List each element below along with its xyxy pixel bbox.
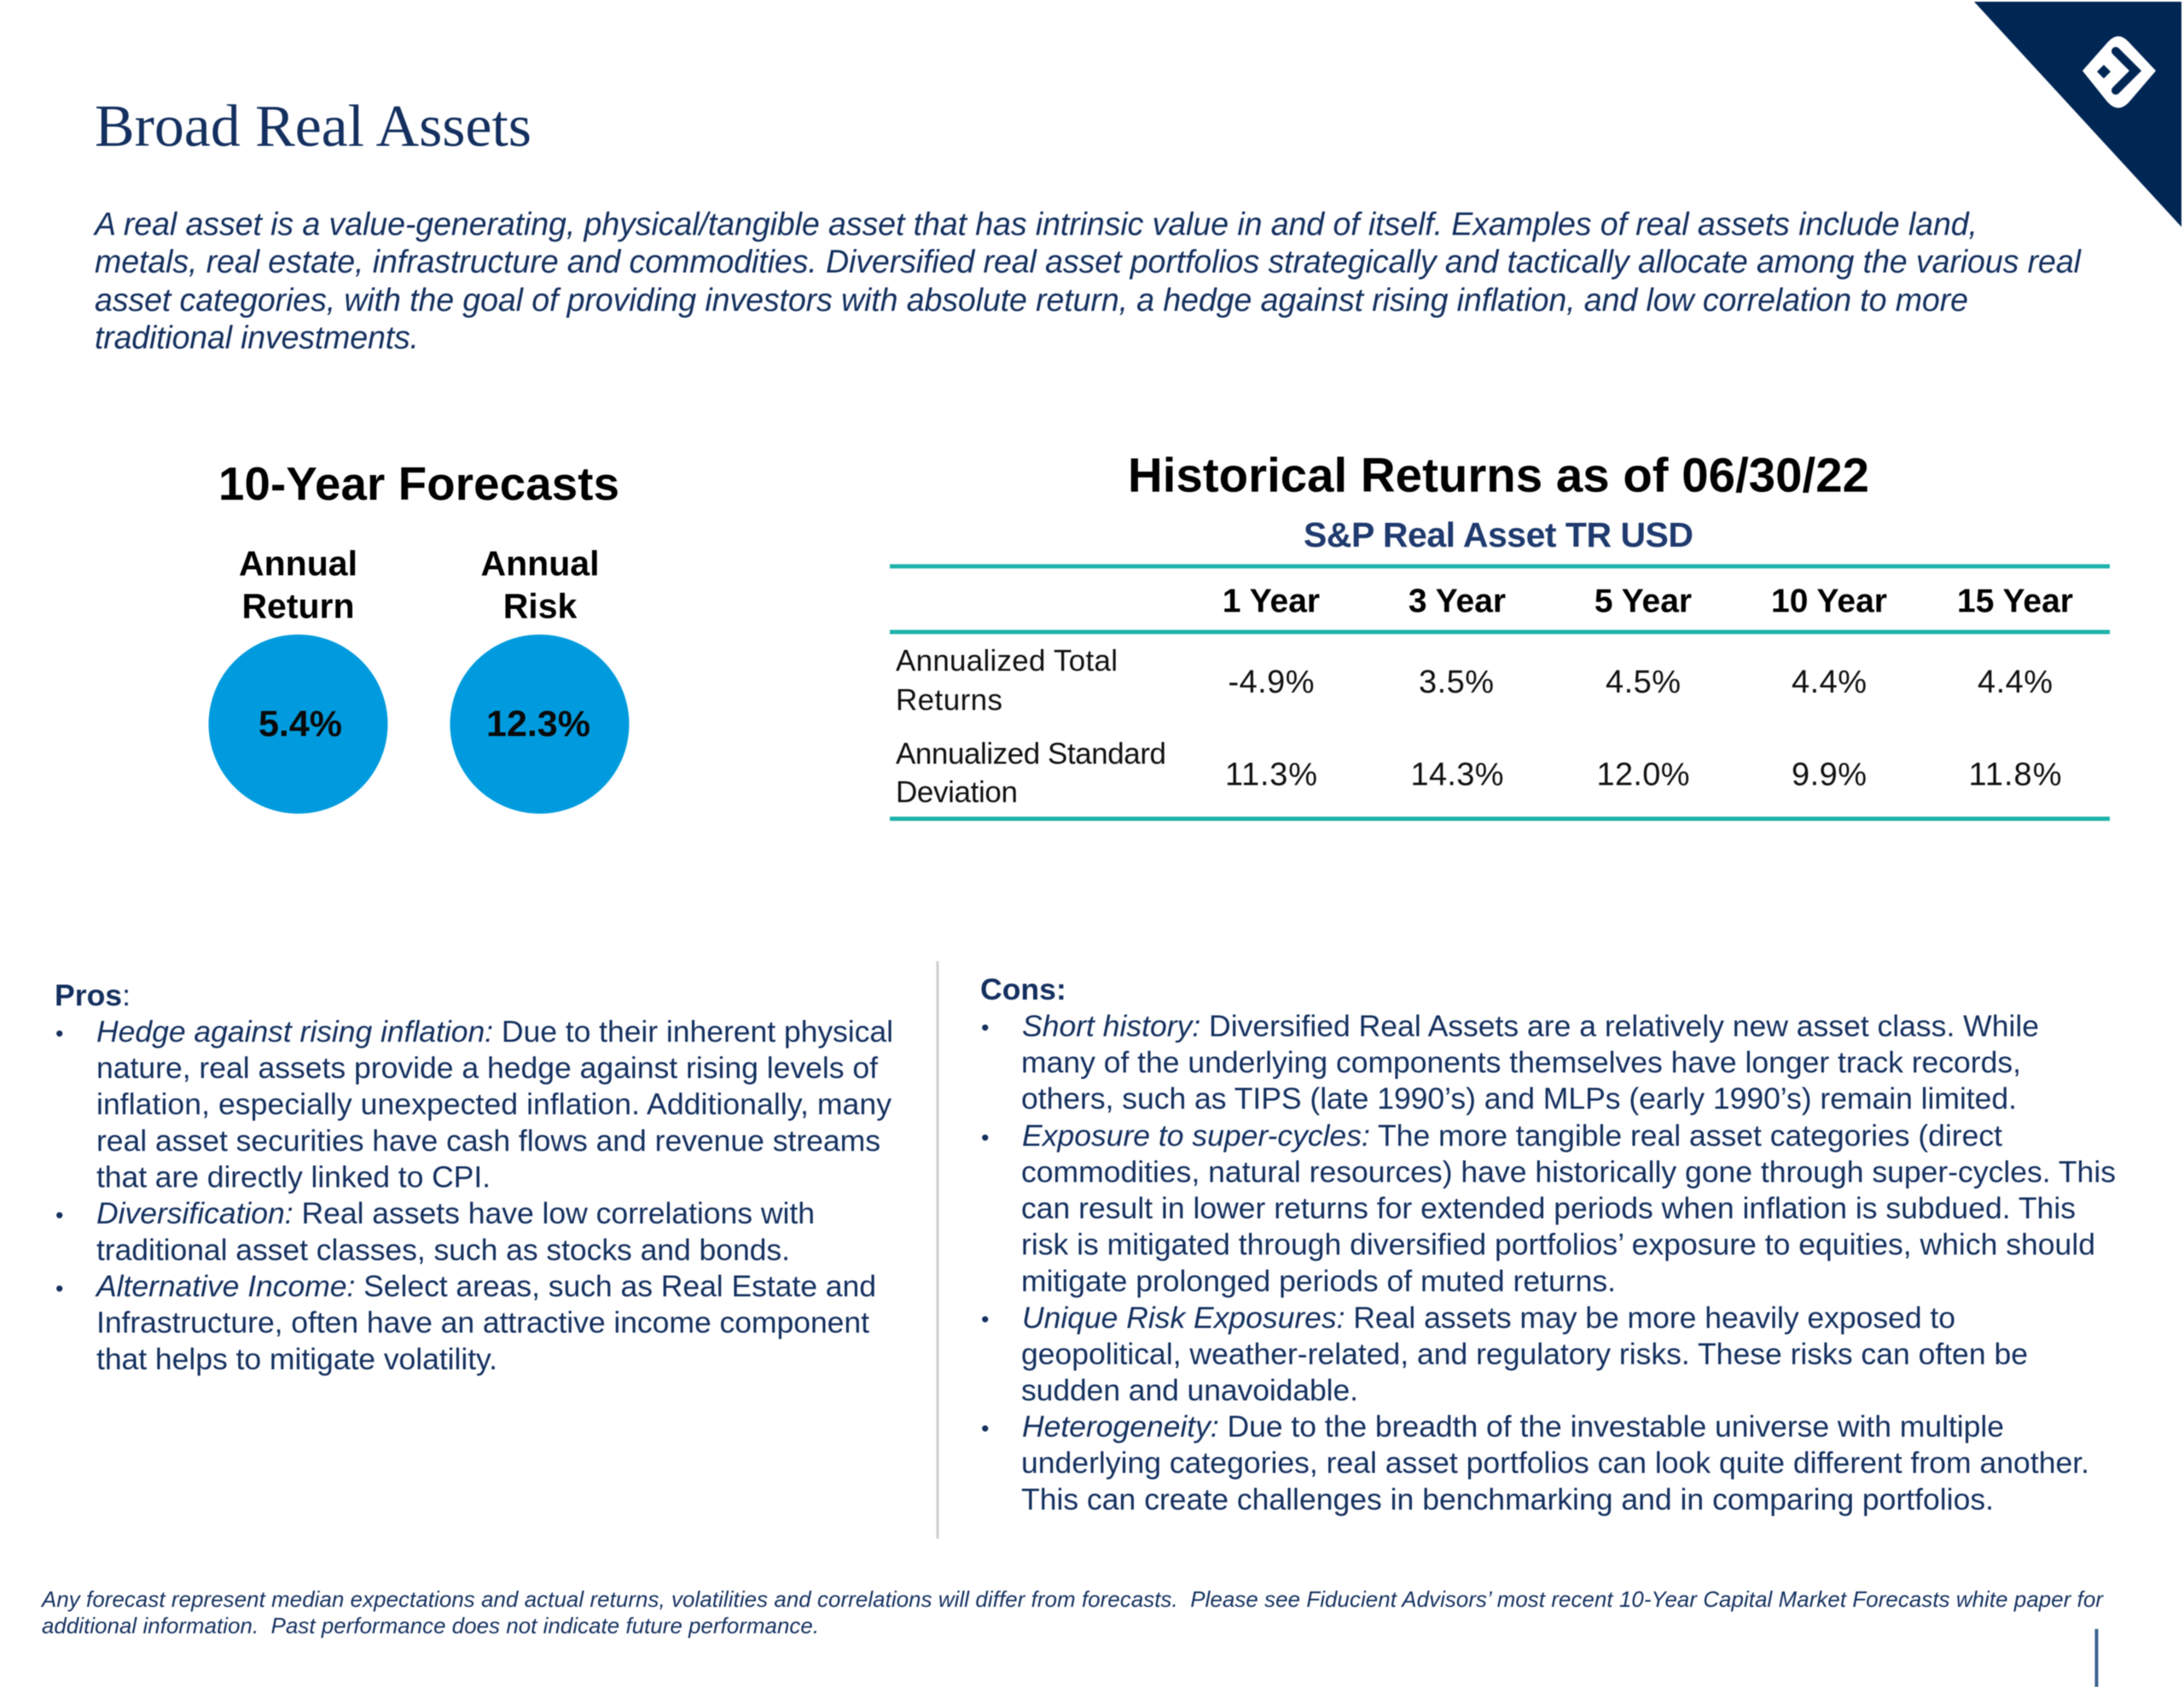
- pros heading: Pros:: [55, 978, 131, 1012]
- circle: annual return 5.4%: [208, 635, 387, 814]
- table row: annualized standard deviation: 14.3%: [1411, 757, 1503, 793]
- table header row: 5 Year: [1594, 583, 1692, 619]
- con: unique risk exposures: •: [981, 1307, 989, 1332]
- table header row: 1 Year: [1223, 583, 1320, 619]
- corner logo: [1974, 2, 2181, 227]
- panel: 10-year forecasts: [208, 458, 630, 814]
- con: exposure to super-cycles: can result in lower returns for extended periods when inflation is subdued. This: [1021, 1191, 2076, 1225]
- pro: alternative income: that helps to mitigate volatility.: [96, 1342, 497, 1377]
- panel: cons: [980, 972, 2116, 1516]
- annual risk label: Annual: [481, 544, 599, 583]
- table row: annualized total returns: [896, 645, 2053, 716]
- intro paragraph: asset categories, with the goal of providing investors with absolute return, a hedge against rising inflation, and low correlation to more: [95, 281, 1968, 317]
- subheading: index name: S&P Real Asset TR USD: [1304, 515, 1693, 554]
- con: short history: others, such as TIPS (late 1990’s) and MLPs (early 1990’s) remain limited.: [1021, 1081, 2017, 1116]
- pro: diversification: Diversification: Real assets have low correlations with: [96, 1196, 815, 1230]
- pro: alternative income: •: [55, 1276, 63, 1301]
- con: heterogeneity: This can create challenges in benchmarking and in comparing portfolios.: [1021, 1482, 1994, 1516]
- con: heterogeneity: Heterogeneity: Due to the breadth of the investable universe with multiple: [1022, 1410, 2004, 1444]
- table row: annualized total returns: -4.9%: [1228, 664, 1314, 700]
- con: unique risk exposures: sudden and unavoidable.: [1021, 1373, 1358, 1407]
- table row: annualized total returns: 4.5%: [1606, 664, 1681, 700]
- table header row: 10 Year: [1771, 583, 1887, 619]
- table header row: 3 Year: [1409, 583, 1506, 619]
- con: short history: many of the underlying components themselves have longer track records,: [1021, 1046, 2021, 1080]
- intro paragraph: [93, 206, 2082, 355]
- con: exposure to super-cycles: risk is mitigated through diversified portfolios’ exposure to equities, which should: [1021, 1227, 2095, 1261]
- footnote: Any forecast represent median expectations and actual returns, volatilities and correlations will differ from forecasts. Please see Fiducient Advisors’ most recent 10-Year Capital Market Forecasts white paper for: [40, 1588, 2104, 1612]
- con: heterogeneity: [981, 1410, 2089, 1516]
- table row: annualized standard deviation: Annualized Standard: [896, 737, 1166, 771]
- table row: annualized total returns: Annualized Total: [896, 645, 1118, 677]
- pro: hedge against rising inflation: Hedge against rising inflation: Due to their inherent physical: [96, 1015, 893, 1049]
- con: exposure to super-cycles: mitigate prolonged periods of muted returns.: [1021, 1264, 1616, 1298]
- pro: hedge against rising inflation: nature, real assets provide a hedge against rising levels of: [96, 1051, 878, 1085]
- con: exposure to super-cycles: commodities, natural resources) have historically gone through super-cycles. This: [1021, 1155, 2116, 1189]
- panel: historical returns: [890, 449, 2110, 819]
- panel: pros: [55, 978, 893, 1377]
- cons heading: Cons:: [980, 972, 1066, 1006]
- pro: hedge against rising inflation: inflation, especially unexpected inflation. Additionally, many: [96, 1087, 892, 1121]
- intro paragraph: traditional investments.: [95, 319, 419, 355]
- pro: diversification: •: [55, 1203, 63, 1228]
- pro: alternative income: [55, 1269, 876, 1377]
- intro paragraph: metals, real estate, infrastructure and commodities. Diversified real asset portfolios strategically and tactically allocate among the various real: [95, 244, 2082, 280]
- pro: hedge against rising inflation: real asset securities have cash flows and revenue streams: [96, 1124, 880, 1158]
- con: heterogeneity: underlying categories, real asset portfolios can look quite different from another.: [1021, 1446, 2089, 1480]
- con: short history: •: [981, 1015, 989, 1041]
- con: exposure to super-cycles: Exposure to super-cycles: The more tangible real asset categories (direct: [1022, 1119, 2002, 1153]
- table header row: 15 Year: [1957, 583, 2073, 619]
- intro paragraph: A real asset is a value-generating, physical/tangible asset that has intrinsic value in and of itself. Examples of real assets include land,: [93, 206, 1978, 242]
- con: unique risk exposures: geopolitical, weather-related, and regulatory risks. These risks can often be: [1021, 1336, 2028, 1371]
- table row: annualized total returns: 3.5%: [1419, 664, 1494, 700]
- pro: hedge against rising inflation: [55, 1015, 893, 1194]
- table row: annualized standard deviation: Deviation: [896, 776, 1018, 809]
- table row: annualized total returns: Returns: [896, 684, 1002, 716]
- pro: hedge against rising inflation: •: [55, 1021, 63, 1046]
- heading: historical returns: Historical Returns as of 06/30/22: [1128, 449, 1869, 501]
- table header row: [1223, 583, 2073, 619]
- con: short history: [981, 1009, 2039, 1116]
- annual return label: Return: [241, 587, 355, 626]
- pro: hedge against rising inflation: that are directly linked to CPI.: [96, 1160, 491, 1194]
- table row: annualized standard deviation: 11.3%: [1225, 757, 1317, 793]
- con: short history: Short history: Diversified Real Assets are a relatively new asset class. While: [1022, 1009, 2039, 1043]
- con: exposure to super-cycles: •: [981, 1125, 989, 1151]
- pro: diversification: traditional asset classes, such as stocks and bonds.: [96, 1233, 790, 1267]
- con: unique risk exposures: [981, 1301, 2028, 1407]
- con: exposure to super-cycles: [981, 1119, 2116, 1298]
- table row: annualized standard deviation: 11.8%: [1969, 757, 2061, 793]
- con: unique risk exposures: Unique Risk Exposures: Real assets may be more heavily exposed to: [1022, 1301, 1955, 1335]
- circle: annual return 5.4%: 5.4%: [258, 704, 342, 745]
- table row: annualized total returns: 4.4%: [1792, 664, 1867, 700]
- circle: annual risk 12.3%: 12.3%: [486, 704, 590, 745]
- pro: alternative income: Infrastructure, often have an attractive income component: [96, 1305, 869, 1339]
- annual risk label: Risk: [503, 587, 577, 626]
- table row: annualized total returns: 4.4%: [1978, 664, 2053, 700]
- circle: annual risk 12.3%: [450, 635, 630, 814]
- heading: 10-Year Forecasts: 10-Year Forecasts: [218, 458, 619, 510]
- annual return label: Annual: [239, 544, 357, 583]
- table row: annualized standard deviation: 12.0%: [1597, 757, 1689, 793]
- pro: diversification: [55, 1196, 815, 1267]
- table row: annualized standard deviation: [896, 737, 2061, 809]
- pro: alternative income: Alternative Income: Select areas, such as Real Estate and: [95, 1269, 876, 1303]
- footnote: additional information. Past performance does not indicate future performance.: [42, 1615, 819, 1638]
- table row: annualized standard deviation: 9.9%: [1792, 757, 1867, 793]
- con: heterogeneity: •: [981, 1416, 989, 1441]
- footnote: [40, 1588, 2104, 1638]
- title: Broad Real Assets: [95, 94, 531, 159]
